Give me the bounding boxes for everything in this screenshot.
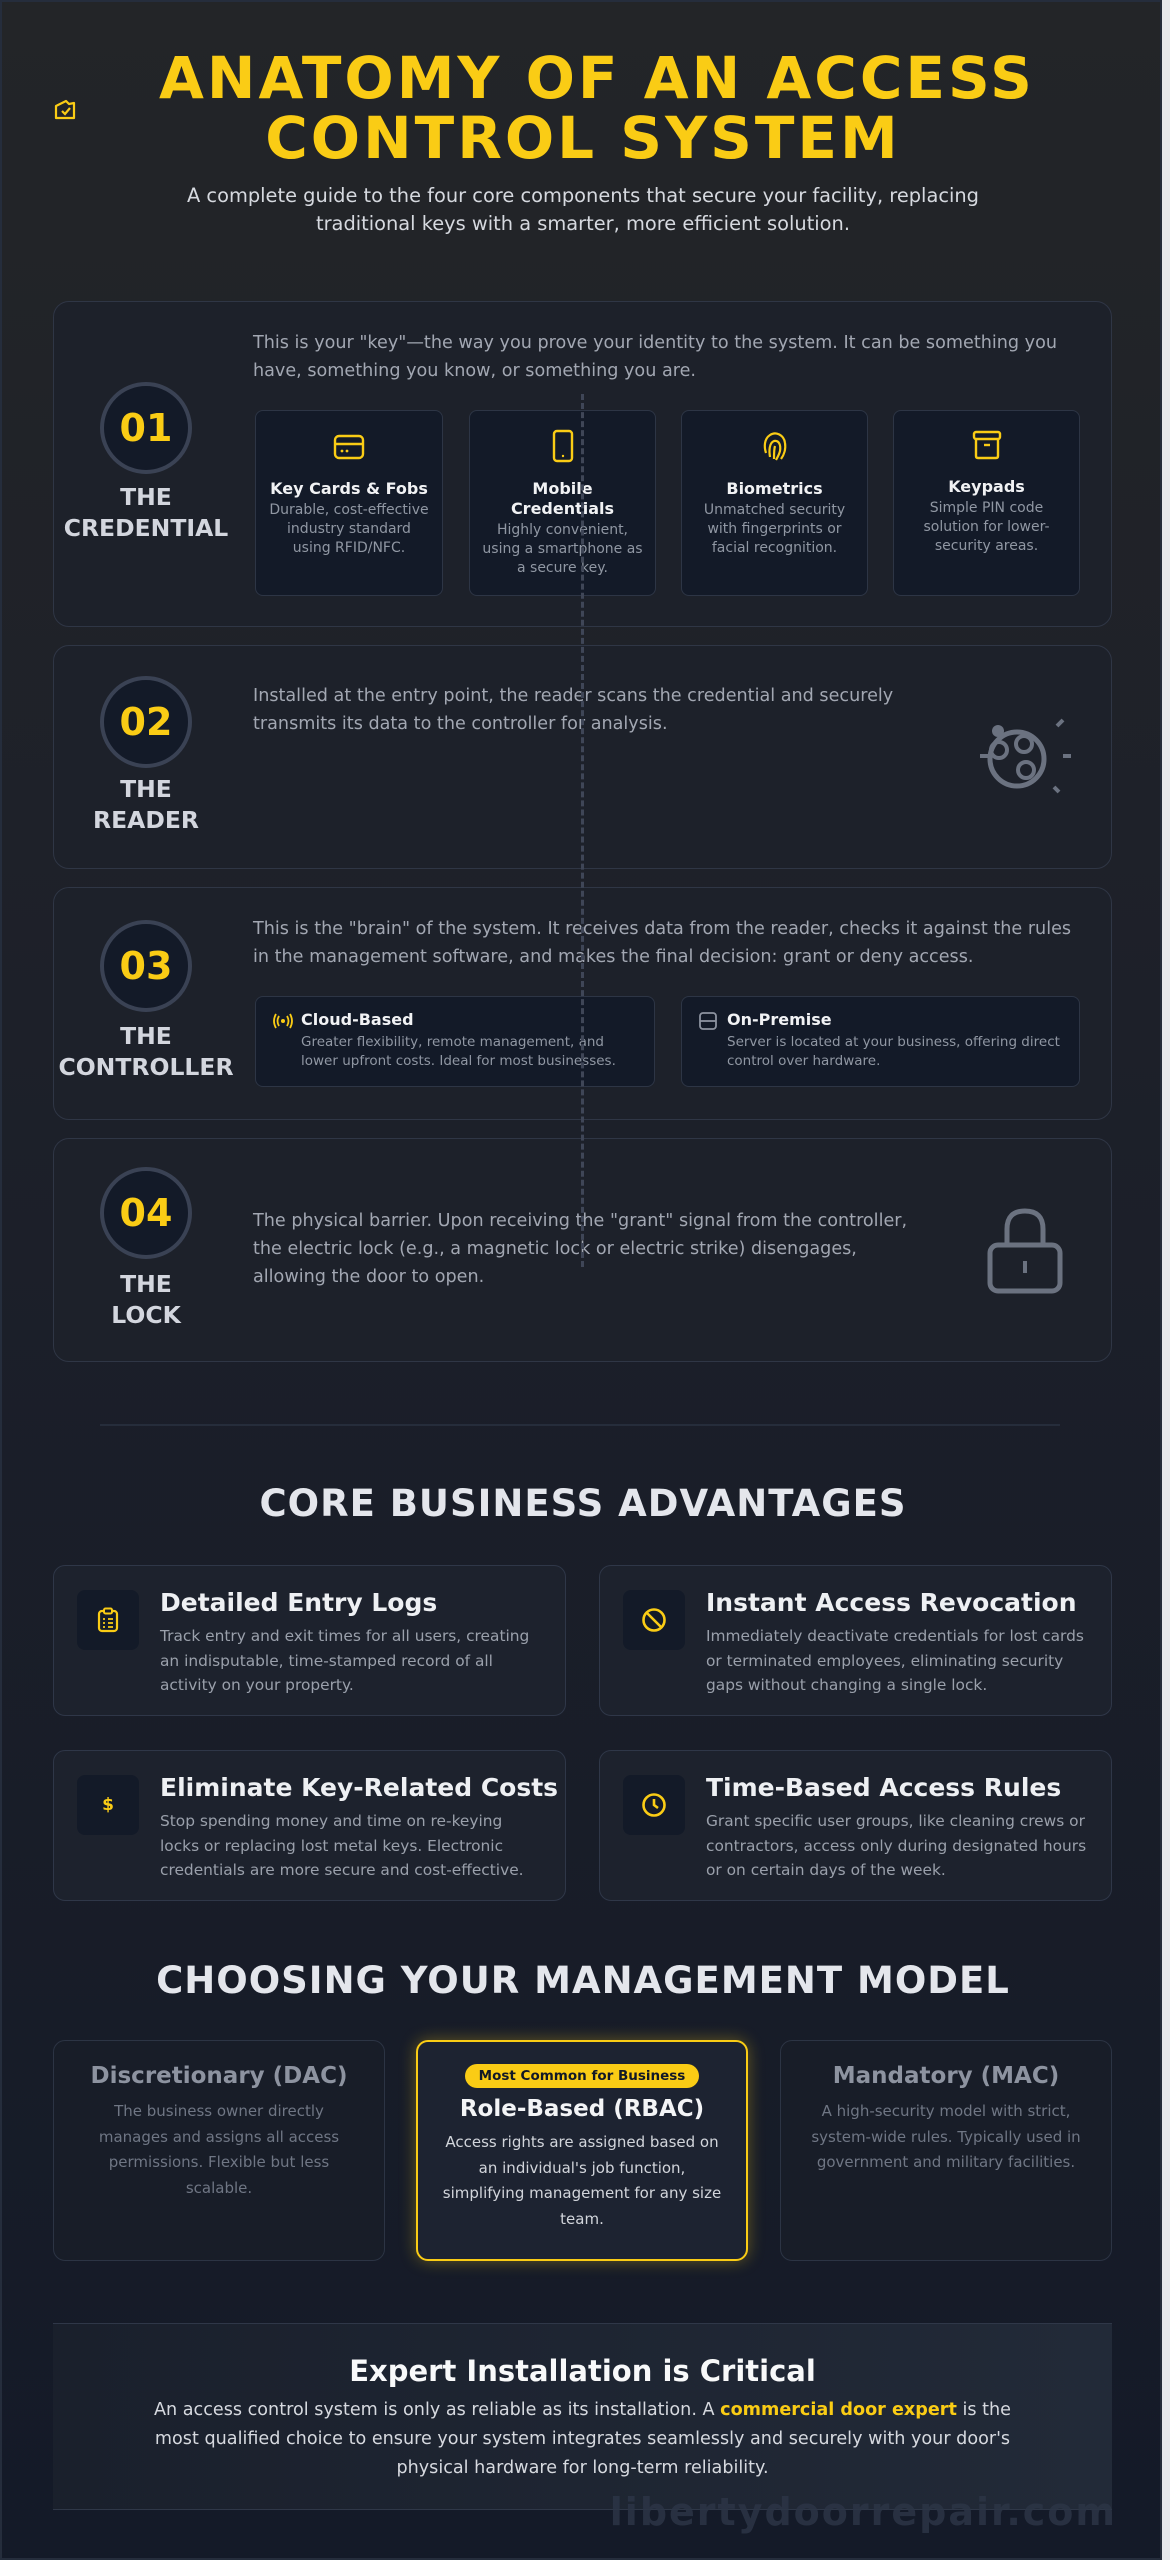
icon: clock — [623, 1775, 685, 1835]
card: MAC — [780, 2040, 1112, 2261]
label: the controller: THE — [120, 1022, 172, 1050]
card: MAC: A high-security model with strict, system-wide rules. Typically used in government and military facilities. — [811, 2102, 1081, 2171]
card: DAC — [53, 2040, 385, 2261]
badge — [465, 2064, 699, 2088]
card: on-premise — [681, 996, 1080, 1087]
label: the lock — [111, 1270, 182, 1329]
icon: phone — [552, 430, 574, 462]
label: the credential: CREDENTIAL — [64, 514, 228, 542]
badge: Most Common for Business — [479, 2068, 685, 2084]
circle 02 — [100, 676, 192, 768]
card: time rules — [599, 1750, 1112, 1901]
connector: dashed line — [581, 394, 584, 1267]
watermark: libertydoorrepair.com — [610, 2490, 1117, 2534]
card: key cards: Key Cards & Fobs — [270, 479, 428, 498]
card: keypads — [893, 410, 1080, 596]
icon: clipboard — [77, 1590, 139, 1650]
icon: reader — [980, 718, 1071, 794]
card: biometrics: Unmatched security with fingerprints or facial recognition. — [704, 502, 845, 556]
heading: management model: CHOOSING YOUR MANAGEMENT MODEL — [156, 1959, 1010, 2002]
card: time rules: Time-Based Access Rules — [706, 1773, 1061, 1802]
label: the reader: THE — [120, 775, 172, 803]
card: RBAC: Role-Based (RBAC) — [460, 2096, 704, 2122]
card: cloud-based — [255, 996, 655, 1087]
card: entry logs: Track entry and exit times for all users, creating an indisputable, time-stamped record of all activity on your property. — [160, 1627, 529, 1694]
heading: core business advantages: CORE BUSINESS ADVANTAGES — [259, 1482, 907, 1525]
title — [159, 44, 1035, 172]
card: DAC: Discretionary (DAC) — [91, 2063, 347, 2089]
card: RBAC: Access rights are assigned based on an individual's job function, simplifying management for any size team. — [443, 2133, 721, 2228]
label: the reader — [93, 775, 199, 834]
credential description: This is your "key"—the way you prove your identity to the system. It can be something you have, something you know, or something you are. — [253, 333, 1057, 381]
card: biometrics: Biometrics — [726, 479, 823, 498]
card: key cards: Durable, cost-effective industry standard using RFID/NFC. — [269, 502, 429, 556]
icon: lock — [988, 1208, 1062, 1294]
label: the controller — [58, 1022, 234, 1081]
label: the controller: CONTROLLER — [58, 1053, 234, 1081]
card: mobile: Highly convenient, using a smartphone as a secure key. — [482, 522, 643, 576]
card: entry logs — [53, 1565, 566, 1716]
panel: credential — [53, 301, 1112, 627]
icon: fingerprint — [764, 432, 786, 460]
card: revocation — [599, 1565, 1112, 1716]
card: mobile: Credentials — [511, 499, 614, 518]
card: entry logs: Detailed Entry Logs — [160, 1588, 437, 1617]
icon: header badge — [54, 100, 76, 120]
icon: dollar — [77, 1775, 139, 1835]
card: mobile — [469, 410, 656, 596]
callout: expert installation: An access control system is only as reliable as its installation. A commercial door expert is the most qualified choice to ensure your system integrates seamlessly and securely with your door's physical hardware for long-term reliability. — [154, 2400, 1011, 2478]
icon: keypad box — [972, 430, 1002, 460]
card: DAC: The business owner directly manages and assigns all access permissions. Flexible but less scalable. — [99, 2102, 339, 2196]
card: MAC: Mandatory (MAC) — [833, 2063, 1059, 2089]
card: cloud-based: Cloud-Based — [301, 1010, 414, 1029]
reader description: Installed at the entry point, the reader scans the credential and securely transmits its data to the controller for analysis. — [253, 686, 893, 734]
title: ANATOMY OF AN ACCESS — [159, 44, 1035, 112]
subtitle: A complete guide to the four core components that secure your facility, replacing traditional keys with a smarter, more efficient solution. — [187, 184, 979, 235]
card: RBAC — [416, 2040, 748, 2261]
circle 04 — [100, 1167, 192, 1259]
label: the credential — [64, 483, 228, 542]
controller description: This is the "brain" of the system. It receives data from the reader, checks it against the rules in the management software, and makes the final decision: grant or deny access. — [253, 919, 1071, 967]
card: keypads: Simple PIN code solution for lower-security areas. — [923, 500, 1050, 554]
panel: controller — [53, 887, 1112, 1120]
title: CONTROL SYSTEM — [265, 104, 901, 172]
icon: cloud signal — [273, 1014, 293, 1028]
divider — [100, 1424, 1060, 1426]
card: biometrics — [681, 410, 868, 596]
card: mobile: Mobile — [532, 479, 593, 498]
card: cloud-based: Greater flexibility, remote management, and lower upfront costs. Ideal for most businesses. — [301, 1034, 616, 1069]
icon: card — [334, 434, 364, 460]
card: revocation: Instant Access Revocation — [706, 1588, 1077, 1617]
card: on-premise: Server is located at your business, offering direct control over hardware. — [727, 1034, 1060, 1069]
label: the credential: THE — [120, 483, 172, 511]
icon: ban — [623, 1590, 685, 1650]
callout: expert installation — [53, 2323, 1112, 2510]
circle 03 — [100, 920, 192, 1012]
callout: expert installation: Expert Installation is Critical — [349, 2354, 816, 2388]
card: key cards — [255, 410, 443, 596]
label: the lock: THE — [120, 1270, 172, 1298]
circle 01 — [100, 382, 192, 474]
circle 03: 03 — [120, 944, 172, 988]
panel: lock — [53, 1138, 1112, 1362]
icon: dollar: $ — [102, 1795, 114, 1815]
card: keypads: Keypads — [948, 477, 1025, 496]
panel: reader — [53, 645, 1112, 869]
circle 04: 04 — [120, 1191, 172, 1235]
card: revocation: Immediately deactivate credentials for lost cards or terminated employees, eliminating security gaps without changing a single lock. — [706, 1627, 1084, 1694]
label: the reader: READER — [93, 806, 199, 834]
circle 01: 01 — [120, 406, 172, 450]
lock description: The physical barrier. Upon receiving the "grant" signal from the controller, the electric lock (e.g., a magnetic lock or electric strike) disengages, allowing the door to open. — [253, 1211, 907, 1287]
card: key costs: Stop spending money and time on re-keying locks or replacing lost metal keys. Electronic credentials are more secure and cost-effective. — [160, 1812, 524, 1879]
card: key costs: Eliminate Key-Related Costs — [160, 1773, 558, 1802]
card: on-premise: On-Premise — [727, 1010, 832, 1029]
icon: server — [699, 1012, 717, 1030]
label: the lock: LOCK — [111, 1301, 181, 1329]
card: key costs — [53, 1750, 566, 1901]
card: time rules: Grant specific user groups, like cleaning crews or contractors, access only during designated hours or on certain days of the week. — [706, 1812, 1086, 1879]
circle 02: 02 — [120, 700, 172, 744]
